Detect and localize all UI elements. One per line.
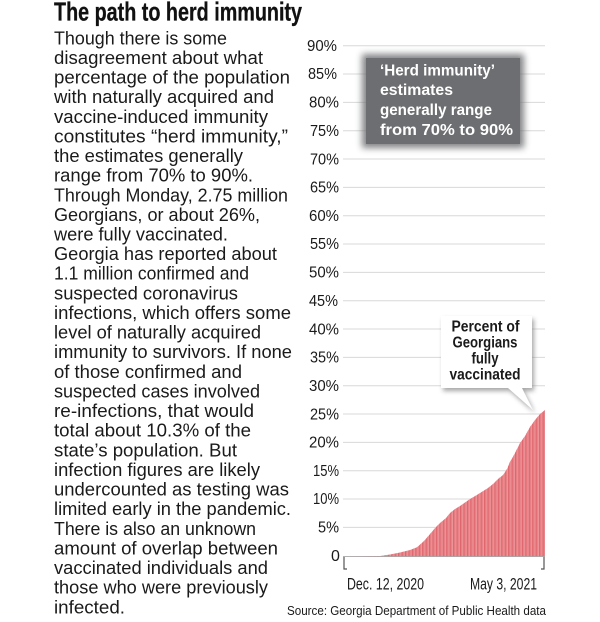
callout: herd immunity estimates: estimates [380, 82, 453, 99]
x-axis labels: Dec. 12, 2020 [347, 576, 424, 594]
y-axis labels: 65% [310, 180, 339, 196]
y-axis labels: 75% [310, 123, 339, 140]
callout: percent of Georgians fully vaccinated: fully [472, 350, 499, 368]
y-axis labels: 20% [309, 434, 339, 452]
y-axis labels: 30% [309, 378, 339, 395]
y-axis labels: 10% [313, 491, 339, 508]
y-axis labels: 85% [308, 66, 337, 83]
x-axis labels: May 3, 2021 [470, 576, 537, 594]
callout: herd immunity estimates: from 70% to 90% [380, 122, 513, 139]
y-axis labels: 35% [310, 350, 339, 366]
text block: body copy: limited early in the pandemic. [54, 499, 291, 519]
text block: body copy: infections, which offers some [54, 303, 291, 323]
text block: body copy: vaccinated individuals and [54, 558, 268, 578]
y-axis labels: 80% [309, 94, 339, 112]
callout: percent of Georgians fully vaccinated: Percent of [452, 318, 520, 336]
y-axis labels: 55% [310, 236, 339, 253]
x-axis labels [347, 576, 537, 594]
y-axis labels [307, 38, 340, 565]
text block: body copy: undercounted as testing was [54, 480, 289, 500]
text block: body copy: level of naturally acquired [54, 323, 261, 343]
text block: body copy: re-infections, that would [54, 401, 254, 421]
text block: body copy: range from 70% to 90%. [54, 166, 253, 186]
text block: body copy: 1.1 million confirmed and [54, 264, 249, 284]
text block: body copy: those who were previously [54, 578, 268, 598]
text block: body copy: constitutes “herd immunity,” [54, 126, 288, 146]
y-axis labels: 70% [310, 152, 339, 168]
callout: percent of Georgians fully vaccinated: vaccinated [450, 366, 520, 384]
text block: body copy: of those confirmed and [54, 362, 242, 382]
text block: body copy: disagreement about what [54, 48, 263, 68]
source note: Source: Georgia Department of Public Health data [287, 603, 547, 618]
baseline [343, 556, 545, 558]
text block: body copy: with naturally acquired and [53, 87, 274, 107]
y-axis labels: 15% [313, 463, 339, 480]
callout: herd immunity estimates: ‘Herd immunity’ [380, 62, 495, 80]
text block: body copy: total about 10.3% of the [54, 421, 251, 441]
text block: body copy: amount of overlap between [54, 538, 278, 558]
text block: body copy: state’s population. But [54, 440, 237, 460]
chart: percent of Georgians fully vaccinated [307, 38, 545, 594]
text block: body copy: infection figures are likely [54, 460, 260, 480]
callout: herd immunity estimates: generally range [380, 102, 492, 119]
y-axis labels: 25% [310, 406, 339, 424]
y-axis labels: 5% [318, 520, 339, 536]
text block: body copy: the estimates generally [54, 146, 243, 166]
text block: body copy: infected. [54, 597, 125, 617]
y-axis labels: 90% [307, 38, 337, 55]
text block: body copy: were fully vaccinated. [53, 224, 228, 244]
y-axis labels: 0 [331, 548, 340, 565]
text block: body copy: Though there is some [54, 28, 227, 48]
text block: body copy: Through Monday, 2.75 million [54, 185, 288, 205]
text block: body copy [53, 28, 292, 617]
text block: body copy: suspected cases involved [54, 382, 260, 402]
y-axis labels: 50% [309, 264, 339, 282]
y-axis labels: 45% [309, 293, 338, 310]
y-axis labels: 40% [309, 322, 339, 338]
text block: body copy: Georgia has reported about [54, 244, 277, 264]
text block: body copy: vaccine-induced immunity [54, 107, 268, 127]
text block: body copy: Georgians, or about 26%, [54, 205, 260, 225]
callout: percent of Georgians fully vaccinated [441, 316, 535, 413]
callout: percent of Georgians fully vaccinated: Georgians [452, 334, 518, 352]
text block: body copy: There is also an unknown [54, 519, 256, 539]
y-axis labels: 60% [309, 208, 339, 225]
text block: body copy: immunity to survivors. If none [54, 342, 292, 362]
callout: herd immunity estimates [362, 54, 524, 148]
text block: body copy: suspected coronavirus [54, 283, 238, 303]
bars: daily vaccination share [343, 410, 545, 556]
text block: body copy: percentage of the population [54, 68, 290, 88]
date bracket [344, 557, 544, 569]
